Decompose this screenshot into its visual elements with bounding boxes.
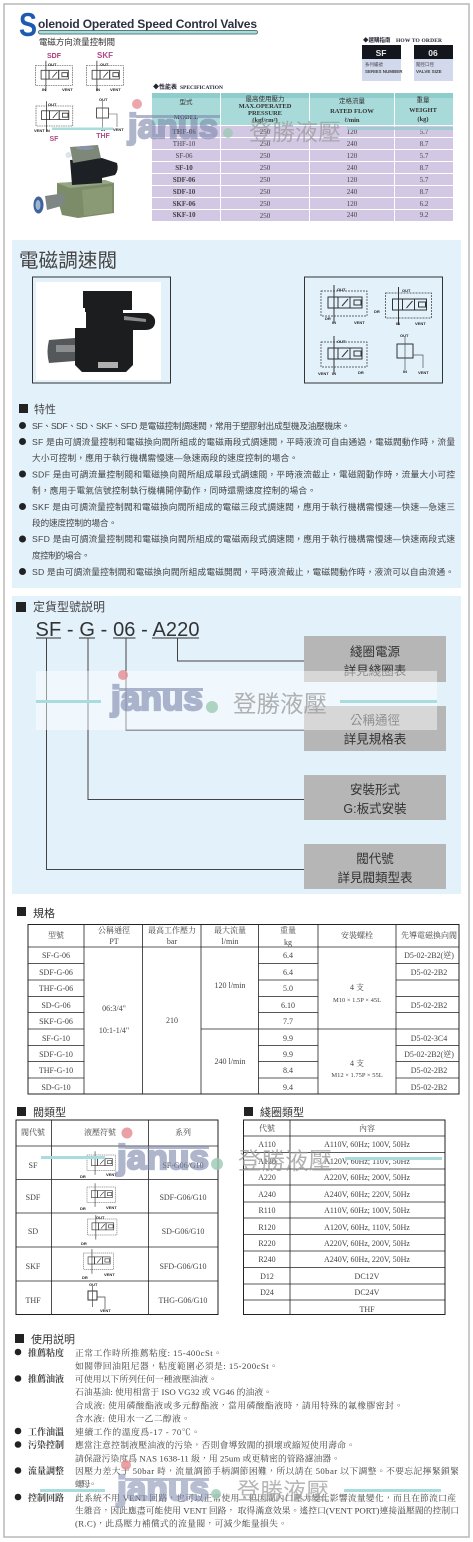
watermark: bottom: janus (116, 1470, 209, 1508)
specification table: 250 (260, 176, 271, 184)
specification table: 240 (347, 188, 358, 196)
table: specifications: 型號 (48, 930, 64, 940)
table: valve types: SF (29, 1161, 38, 1170)
feature list: SF 是由可調流量控制和電磁換向閥所組成的電磁兩段式調速閥，平時液流可自由通過，電磁閥動作時，流量 (32, 436, 455, 447)
table: coil types: A120 (258, 1157, 276, 1166)
table: specifications: 7.7 (283, 1017, 293, 1026)
table: coil types: A120V, 60Hz; 110V, 50Hz (324, 1157, 410, 1166)
feature list: 段的速度控制的場合。 (32, 517, 117, 528)
specification table: 240 (347, 211, 358, 219)
specification table: 最高使用壓力 (246, 94, 284, 103)
table: coil types: A110V, 60Hz; 100V, 50Hz (324, 1140, 410, 1149)
heading: valve types (17, 1105, 66, 1119)
watermark: bottom (40, 1460, 441, 1508)
specification table: (kgf/cm²) (252, 117, 278, 124)
heading: specifications: 規格 (33, 906, 55, 920)
usage notes list: 含水液: 使用水一乙二醇液。 (75, 1412, 190, 1424)
specification table: 9.2 (420, 211, 429, 219)
specification table: 6.2 (420, 200, 429, 208)
specification table: SDF-10 (173, 188, 196, 196)
table: specifications (28, 924, 459, 1094)
table: specifications: M12 × 1.75P × 55L (331, 1072, 383, 1079)
table: valve types: THF (25, 1296, 41, 1305)
table: valve types (16, 1120, 218, 1314)
table: specifications: kg (284, 938, 292, 947)
specification table: 5.7 (420, 176, 429, 184)
heading: usage notes (15, 1332, 75, 1346)
table: specifications: THF-G-06 (39, 984, 73, 993)
table: specifications: 6.10 (281, 1001, 295, 1010)
hydraulic symbols frame: VENT (318, 371, 329, 376)
box: valve code (304, 844, 446, 889)
table: specifications: 4 支 (350, 982, 364, 992)
box: mounting type: G:板式安裝 (343, 801, 407, 816)
specification table: SDF-06 (173, 176, 196, 184)
icon: valve symbols: OUT (96, 1215, 105, 1220)
watermark: top (52, 99, 453, 146)
table: specifications: D5-02-2B2(逆) (404, 1049, 454, 1059)
table: specifications: 公稱通徑 (98, 925, 130, 935)
box: mounting type (304, 775, 446, 820)
usage notes list: 正常工作時所推薦粘度: 15-400cSt。 (75, 1347, 222, 1358)
watermark: tables: 登勝液壓 (238, 1148, 332, 1174)
specification table: ◆性能表 (153, 83, 177, 91)
heading: ordering code: 定貨型號説明 (33, 599, 105, 614)
header: product title (19, 6, 258, 47)
table: specifications: 9.4 (283, 1083, 293, 1092)
specification table: 8.7 (420, 140, 429, 148)
table: valve types: SDF-G06/G10 (159, 1193, 207, 1202)
specification table: SF-10 (175, 164, 193, 172)
specification table: 8.7 (420, 164, 429, 172)
usage notes list: 如閥帶回油阻尼器，粘度範圍必須是: 15-200cSt。 (75, 1360, 278, 1371)
table: specifications: SDF-G-10 (39, 1050, 73, 1059)
watermark: top: 登勝液壓 (249, 119, 341, 145)
table: specifications: 5.0 (283, 984, 293, 993)
table: specifications: M10 × 1.5P × 45L (333, 997, 381, 1004)
box: nominal diameter (304, 706, 446, 751)
table: valve types: 液壓符號 (84, 1127, 116, 1137)
table: valve types: 閥代號 (21, 1127, 45, 1137)
icon: top hydraulic symbols: IN (101, 127, 105, 132)
hydraulic symbols frame: IN (332, 320, 336, 325)
how to order: VALVE SIZE (416, 69, 442, 74)
icon: valve symbols: VENT (106, 1205, 117, 1210)
specification table: 250 (260, 200, 271, 208)
specification table: 250 (260, 164, 271, 172)
icon: valve symbols: VENT (100, 1308, 111, 1313)
feature list: SFD 是由可調流量控制閥和電磁換向閥所組成的電磁兩段式調速閥，應用于執行機構需慢速—快速兩段式速 (32, 533, 455, 544)
table: coil types: A220 (258, 1173, 276, 1182)
how to order: SF (376, 48, 386, 58)
box: nominal diameter: 公稱通徑 (350, 712, 400, 728)
specification table: ℓ/min (343, 117, 360, 124)
hydraulic symbols frame: IN (396, 321, 400, 326)
icon: top hydraulic symbols: OUT (99, 97, 108, 102)
usage notes list: 流量調整 (28, 1465, 64, 1476)
header: product title: 電磁方向流量控制閥 (39, 37, 115, 47)
table: specifications: D5-02-2B2 (411, 1083, 447, 1092)
valve photo: green body (34, 145, 118, 218)
how to order: SERIES NUMBER (365, 69, 403, 74)
icon: valve symbols: DR (80, 1174, 86, 1179)
table: valve types: SDF (26, 1193, 41, 1202)
table: specifications: SD-G-06 (41, 1001, 71, 1010)
table: specifications: 4 支 (350, 1058, 364, 1068)
icon: top hydraulic symbols (34, 51, 124, 143)
usage notes list: 螺母。 (75, 1478, 97, 1489)
heading: features (19, 402, 56, 416)
table: coil types: DC24V (355, 1288, 380, 1297)
table: coil types: A240V, 60Hz, 220V, 50Hz (324, 1255, 410, 1264)
table: specifications: 6.4 (283, 951, 293, 960)
icon: top hydraulic symbols: IN (96, 87, 100, 92)
box: coil power (304, 636, 446, 682)
icon: top hydraulic symbols: SKF (97, 51, 113, 60)
box: valve code: 閥代號 (356, 851, 394, 866)
table: specifications: 最大流量 (214, 925, 246, 935)
specification table: 250 (260, 188, 271, 196)
table: specifications: 安裝螺栓 (341, 930, 373, 940)
specification table: 250 (260, 212, 271, 220)
icon: valve symbols: VENT (106, 1172, 117, 1177)
icon: top hydraulic symbols: THF (96, 133, 111, 140)
table: specifications: D5-02-2B2 (411, 968, 447, 977)
icon: valve symbols: DR (81, 1241, 87, 1246)
heading: valve types: 閥類型 (33, 1105, 66, 1119)
specification table: 250 (260, 128, 271, 136)
table: coil types: A120V, 60Hz, 110V, 50Hz (324, 1223, 410, 1232)
table: coil types: R110 (258, 1206, 276, 1215)
usage notes list: 合成液: 使用磷酸酯液或多元醇酯液，當用磷酸酯液時，請用特殊的氟橡膠密封。 (75, 1400, 403, 1410)
usage notes list: 推薦粘度 (28, 1347, 64, 1358)
how to order: HOW TO ORDER (396, 38, 443, 44)
table: valve types: 系列 (175, 1127, 191, 1137)
table: specifications: SDF-G-06 (39, 968, 73, 977)
specification table (152, 83, 453, 221)
specification table: 5.7 (420, 128, 429, 136)
hydraulic symbols frame (304, 277, 442, 383)
specification table: RATED FLOW (330, 108, 374, 115)
how to order: 閥徑口徑 (416, 61, 434, 68)
table: specifications: 10:1-1/4" (99, 1026, 129, 1035)
heading: usage notes: 使用説明 (31, 1332, 75, 1346)
heading: specifications (17, 906, 55, 920)
specification table: MAX.OPERATED (239, 103, 292, 110)
specification table: 重量 (416, 96, 430, 104)
feature list: SKF 是由可調流量控制閥和電磁換向閥所組成的電磁三段式調速閥，應用于執行機構需慢速—快速—急速三 (32, 501, 455, 512)
usage notes list: 請保證污染度爲 NAS 1638-11 級，用 25um 或更精密的管路濾油器。 (75, 1452, 340, 1464)
specification table: 250 (260, 152, 271, 160)
hydraulic symbols frame: VENT (415, 321, 426, 326)
table: specifications: 先導電磁換向閥 (401, 930, 457, 940)
specification table: 120 (347, 176, 358, 184)
icon: valve symbols: DR (80, 1206, 86, 1211)
specification table: 型式 (180, 97, 193, 106)
heading: coil types (244, 1105, 304, 1119)
table: coil types: A240 (258, 1190, 276, 1199)
feature list: 度控制的場合。 (32, 550, 90, 560)
icon: valve symbols: OUT (89, 1282, 98, 1287)
usage notes list: 此系統不用 VENT 回路，也可以正常使用，但因閥內口壓力變化影響流量變化，而且在節流口産 (75, 1492, 456, 1503)
table: specifications: SKF-G-06 (39, 1017, 73, 1026)
heading: product name: 電磁調速閥 (19, 250, 117, 272)
table: coil types: R120 (258, 1223, 276, 1232)
table: coil types: 內容 (359, 1123, 375, 1133)
watermark: bottom: 登勝液壓 (237, 1478, 329, 1504)
how to order (362, 36, 453, 81)
watermark: top: janus (127, 108, 218, 146)
specification table: SKF-06 (173, 200, 196, 208)
feature list (19, 420, 455, 577)
box: coil power: 詳見綫圈表 (344, 663, 407, 678)
table: coil types: A220V, 60Hz; 200V, 50Hz (324, 1173, 411, 1182)
table: coil types: A240V, 60Hz; 220V, 50Hz (324, 1190, 411, 1199)
hydraulic symbols frame: VENT (354, 320, 365, 325)
specification table: THF-10 (173, 140, 196, 148)
icon: top hydraulic symbols: VENT (62, 87, 73, 92)
specification table: 250 (260, 140, 271, 148)
specification table: SF-06 (175, 152, 193, 160)
specification table: SKF-10 (173, 211, 196, 219)
table: valve types: THG-G06/G10 (159, 1296, 207, 1305)
specification table: 120 (347, 152, 358, 160)
hydraulic symbols frame: OUT (337, 339, 346, 344)
usage notes list: 生雜音，因此應盡可能使用 VENT 回路， 取得滿意效果。遙控口(VENT PORT)連接溢壓閥的控制口 (75, 1504, 459, 1516)
table: coil types: R220 (258, 1239, 276, 1248)
watermark: ordering panel (36, 670, 437, 730)
table: coil types: A110 (258, 1140, 276, 1149)
box: coil power: 綫圈電源 (350, 645, 400, 659)
table: specifications: 9.9 (283, 1050, 293, 1059)
specification table: PRESSURE (248, 110, 282, 117)
icon: valve symbols: DR (82, 1275, 88, 1280)
table: coil types: D12 (260, 1272, 274, 1281)
specification table: 定格流量 (339, 96, 366, 105)
table: valve types: SFD-G06/G10 (159, 1262, 207, 1271)
usage notes list: 石油基油: 使用相當于 ISO VG32 或 VG46 的油液。 (75, 1386, 272, 1397)
model code: SF - G - 06 - A220 (36, 619, 200, 641)
watermark: ordering panel: 登勝液壓 (233, 691, 327, 717)
leader lines (46, 638, 304, 870)
hydraulic symbols frame: OUT (337, 287, 346, 292)
table: coil types: THF (359, 1305, 375, 1314)
specification table: 5.7 (420, 152, 429, 160)
table: coil types: R240 (258, 1255, 276, 1264)
specification table: 240 (347, 164, 358, 172)
hydraulic symbols frame: VENT (418, 370, 429, 375)
table: valve types: SF-G06/G10 (162, 1161, 204, 1170)
hydraulic symbols frame: DR (374, 309, 380, 314)
box: nominal diameter: 詳見規格表 (344, 732, 407, 746)
usage notes list: 污染控制 (28, 1439, 64, 1450)
table: valve types: SD (28, 1227, 38, 1236)
specification table: 120 (347, 128, 358, 136)
table: coil types: DC12V (355, 1272, 380, 1281)
table: coil types (244, 1120, 445, 1314)
panel: electromagnetic speed valve (12, 240, 461, 588)
heading: features: 特性 (34, 402, 56, 416)
table: specifications: SF-G-06 (42, 951, 70, 960)
table: specifications: SD-G-10 (41, 1083, 71, 1092)
hydraulic symbols frame: OUT (402, 288, 411, 293)
box: mounting type: 安裝形式 (350, 782, 400, 797)
how to order: ◆選購指南 (363, 36, 391, 44)
hydraulic symbols frame: IN (403, 369, 407, 374)
specification table: SPECIFICATION (180, 85, 223, 91)
specification table: 240 (347, 140, 358, 148)
table: specifications: D5-02-2B2 (411, 1001, 447, 1010)
table: specifications: 8.4 (283, 1066, 293, 1075)
icon: top hydraulic symbols: VENT IN (34, 128, 50, 133)
hydraulic symbols frame: OUT (400, 333, 409, 338)
valve photo frame (32, 277, 170, 383)
how to order: 06 (428, 48, 438, 58)
table: valve types: SKF (26, 1262, 41, 1271)
table: specifications: l/min (222, 937, 238, 946)
panel: ordering code (12, 596, 461, 894)
hydraulic symbols frame: DR (325, 316, 331, 321)
table: coil types: A110V, 60Hz; 100V, 50Hz (324, 1206, 410, 1215)
table: specifications: D5-02-2B2 (411, 1066, 447, 1075)
table: specifications: 重量 (280, 925, 296, 935)
icon: top hydraulic symbols: OUT (48, 62, 57, 67)
table: specifications: SF-G-10 (42, 1034, 70, 1043)
icon: top hydraulic symbols: VENT (110, 87, 121, 92)
heading: coil types: 綫圈類型 (260, 1105, 304, 1119)
watermark: tables (41, 1128, 442, 1177)
table: specifications: 6.4 (283, 968, 293, 977)
table: specifications: 210 (166, 1016, 178, 1025)
table: specifications: D5-02-3C4 (411, 1034, 447, 1043)
feature list: SDF 是由可調流量控制閥和電磁換向閥所組成單段式調速閥，平時液流截止，電磁閥動作時，流量大小可控 (32, 468, 455, 480)
icon: top hydraulic symbols: OUT (48, 102, 57, 107)
table: specifications: 240 l/min (215, 1057, 245, 1066)
hydraulic symbols frame: DR (358, 370, 364, 375)
usage notes list: 推薦油液 (28, 1373, 64, 1384)
usage notes list: (R.C)，此爲壓力補償式的流量閥，可減少能量損失。 (75, 1518, 287, 1528)
hydraulic symbols frame: IN (332, 371, 336, 376)
specification table: THF-06 (172, 128, 196, 136)
feature list: 大小可控制，應用于執行機構需慢速—急速兩段的速度控制的場合。 (32, 452, 298, 463)
usage notes list: 可使用以下所列任何一種液壓油液。 (75, 1373, 217, 1384)
header: product title: olenoid Operated Speed Control Valves (38, 17, 257, 31)
watermark: tables: janus (116, 1139, 209, 1177)
icon: top hydraulic symbols: OUT (100, 62, 109, 67)
feature list: 制，應用于電氣信號控制執行機構開停動作，同時還需速度控制的場合。 (32, 484, 316, 496)
usage notes list: 控制回路 (28, 1492, 64, 1503)
usage notes list: 因壓力差大于 50bar 時，流量調節手柄調節困難，所以請在 50bar 以下調整。不要忘記擰緊鎖緊 (75, 1465, 459, 1476)
table: coil types: A220V, 60Hz, 200V, 50Hz (324, 1239, 410, 1248)
table: specifications: 06:3/4" (102, 1004, 126, 1013)
table: coil types: D24 (260, 1288, 274, 1297)
specification table: (kg) (417, 116, 429, 123)
feature list: SD 是由可調流量控制閥和電磁換向閥所組成電磁開閥，平時液流截止，電磁閥動作時，液流可以自由流通。 (32, 566, 454, 577)
table: specifications: D5-02-2B2(逆) (404, 950, 454, 960)
table: valve types: SD-G06/G10 (162, 1227, 204, 1236)
header: product title: S (19, 6, 37, 43)
icon: top hydraulic symbols: SDF (47, 53, 62, 60)
usage notes list (15, 1347, 459, 1528)
icon: top hydraulic symbols: IN (42, 87, 46, 92)
icon: top hydraulic symbols: SF (50, 136, 59, 143)
table: coil types: 代號 (259, 1123, 275, 1133)
table: specifications: 120 l/min (215, 981, 245, 990)
usage notes list: 連續工作的溫度爲-17 - 70℃。 (75, 1426, 200, 1437)
usage notes list: 工作油溫 (28, 1426, 64, 1437)
table: specifications: PT (109, 937, 119, 946)
table: specifications: 最高工作壓力 (148, 925, 196, 935)
specification table: 120 (347, 200, 358, 208)
box: valve code: 詳見閥類型表 (337, 870, 413, 885)
icon: valve symbols: VENT (104, 1272, 115, 1277)
icon: top hydraulic symbols: VENT (113, 127, 124, 132)
table: specifications: bar (167, 937, 177, 946)
watermark: ordering panel: janus (110, 680, 203, 718)
how to order: 系列編號 (365, 61, 383, 68)
feature list: SF、SDF、SD、SKF、SFD 是電磁控制調速閥，常用于塑膠射出成型機及油壓機床。 (32, 420, 350, 431)
icon: valve symbols (80, 1151, 117, 1313)
specification table: MODEL (174, 114, 199, 121)
table: specifications: THF-G-10 (39, 1066, 73, 1075)
specification table: 8.7 (420, 188, 429, 196)
specification table: WEIGHT (409, 107, 438, 114)
table: specifications: 9.9 (283, 1034, 293, 1043)
usage notes list: 應當注意控制液壓油液的污染，否則會導致閥的損壞或縮短使用壽命。 (75, 1439, 355, 1450)
